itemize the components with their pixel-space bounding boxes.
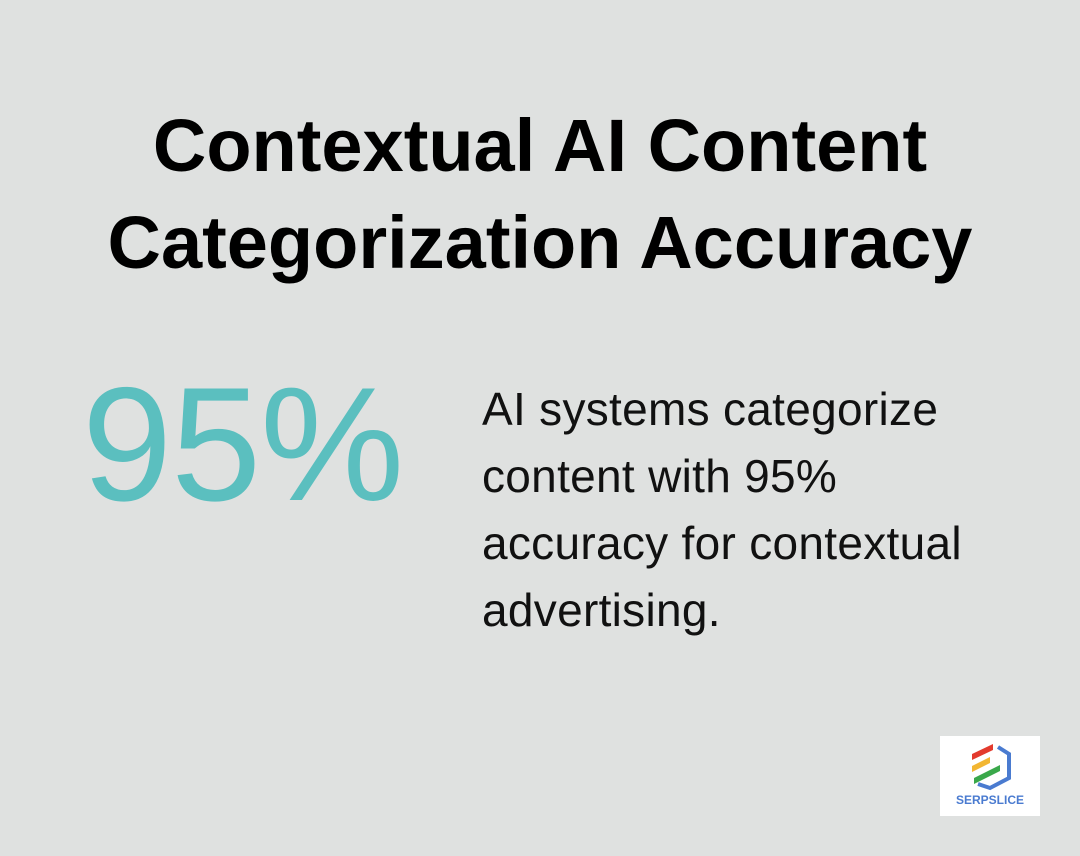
description text: content with 95% <box>482 450 837 502</box>
title: Categorization Accuracy <box>108 201 972 284</box>
description text <box>482 383 962 636</box>
logo <box>940 736 1040 816</box>
description text: AI systems categorize <box>482 383 938 435</box>
logo: SERPSLICE <box>956 793 1024 807</box>
description text: accuracy for contextual <box>482 517 962 569</box>
title <box>108 104 972 284</box>
title: Contextual AI Content <box>153 104 927 187</box>
big stat: 95% <box>82 354 403 535</box>
description text: advertising. <box>482 584 721 636</box>
